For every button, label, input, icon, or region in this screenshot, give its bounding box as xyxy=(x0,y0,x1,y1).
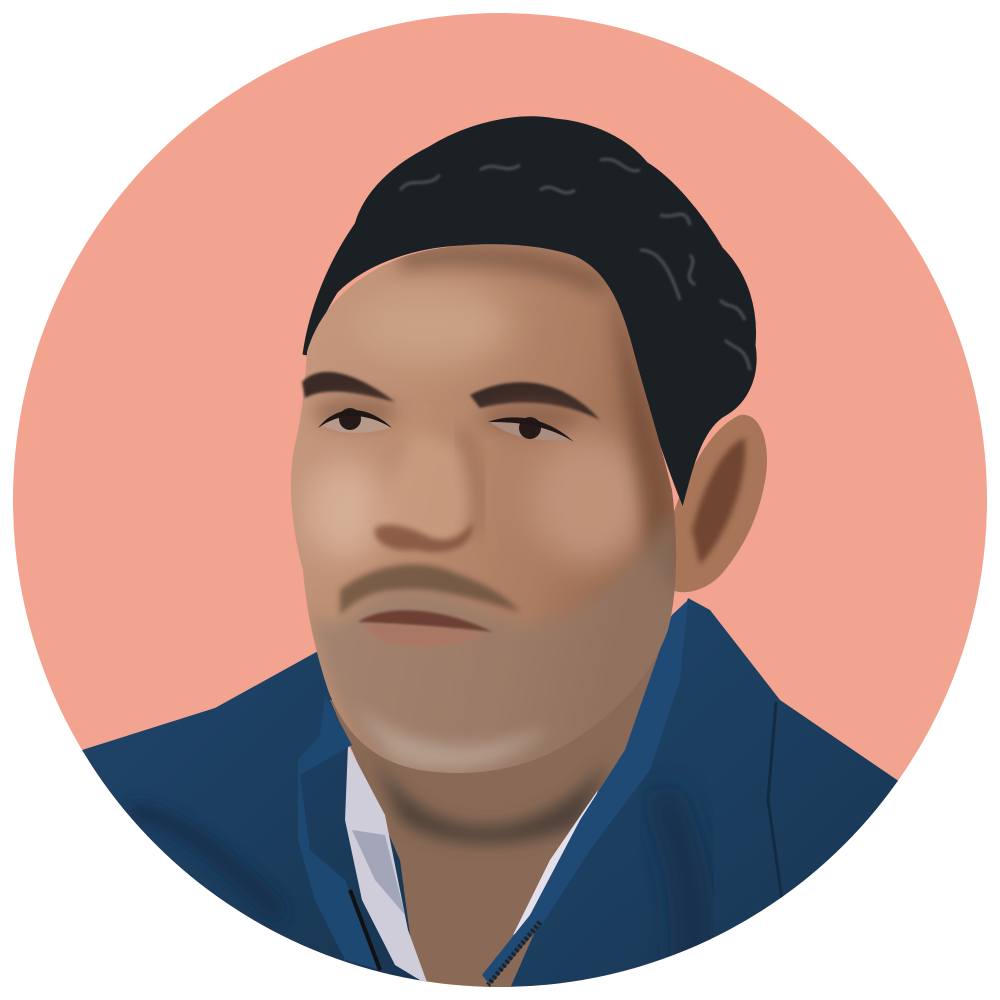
zippers xyxy=(350,890,380,970)
shirt right xyxy=(513,790,598,935)
shirt left xyxy=(345,745,428,985)
hair xyxy=(306,120,755,495)
eyebrow left xyxy=(302,372,395,402)
face shading xyxy=(305,243,680,600)
eyebrow right xyxy=(470,382,600,420)
jacket xyxy=(60,598,920,1000)
stubble xyxy=(310,519,676,773)
collar left xyxy=(298,695,380,970)
face xyxy=(291,243,690,790)
eye socket shadows xyxy=(313,396,580,434)
mouth xyxy=(358,610,493,647)
clothing xyxy=(60,598,920,1000)
collar right xyxy=(482,600,688,985)
eye left xyxy=(318,408,392,433)
neck xyxy=(330,610,682,1000)
hair highlights xyxy=(400,159,750,370)
ear xyxy=(668,415,767,592)
nose xyxy=(369,430,477,552)
eye right xyxy=(488,417,574,442)
